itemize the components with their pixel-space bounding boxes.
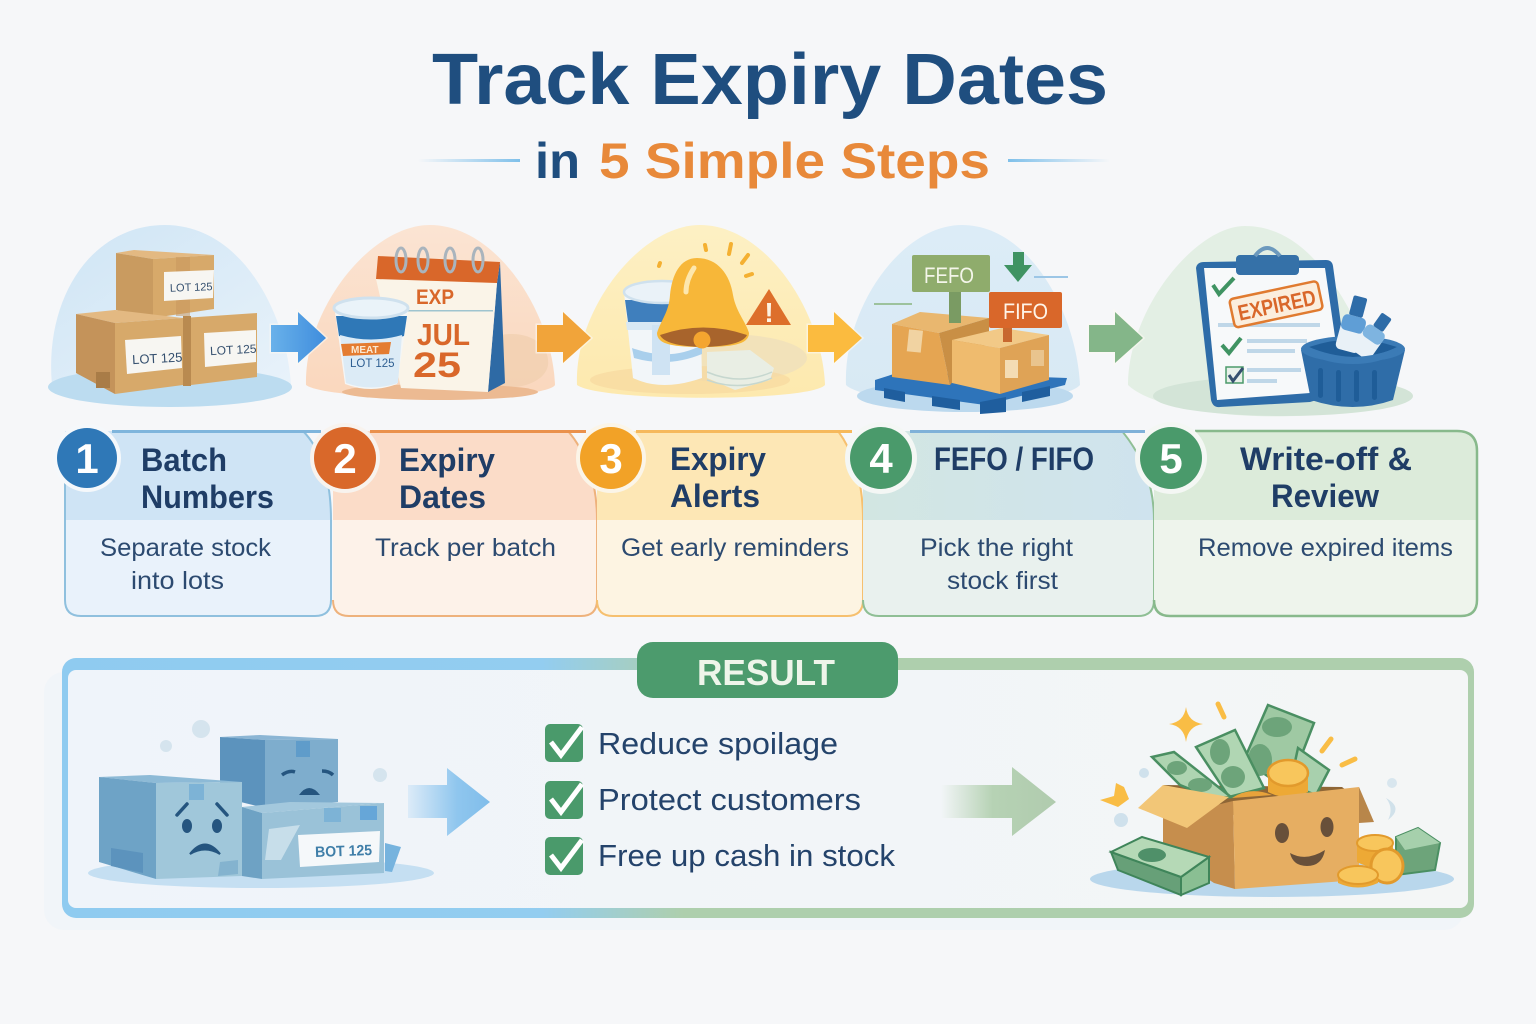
badge 1 bbox=[53, 424, 121, 492]
step card 4: FEFO / FIFO: stock first bbox=[947, 567, 1058, 595]
step card 5: write-off and review: Write-off & bbox=[1240, 441, 1412, 477]
step card 5: write-off and review: Review bbox=[1271, 478, 1379, 514]
icon: clipboard and bin bbox=[1128, 226, 1413, 416]
icon: sad blue boxes: BOT 125 bbox=[315, 842, 372, 861]
step card 5: write-off and review bbox=[1154, 431, 1477, 616]
icon: stacked lot boxes bbox=[48, 225, 292, 407]
result heading pill bbox=[637, 642, 898, 698]
icon: stacked lot boxes: LOT 125 bbox=[132, 350, 183, 367]
step card 4: FEFO / FIFO bbox=[863, 430, 1154, 616]
icon: calendar and cup: LOT 125 bbox=[350, 358, 395, 370]
badge 5: 5 bbox=[1159, 435, 1183, 482]
icon: FEFO FIFO pallet: FEFO bbox=[924, 263, 974, 288]
result heading pill: RESULT bbox=[697, 652, 835, 693]
badge 4: 4 bbox=[869, 435, 893, 482]
step card 3: expiry alerts: Get early reminders bbox=[621, 534, 849, 562]
icon: calendar and cup: MEAT bbox=[351, 345, 379, 356]
step card 4: FEFO / FIFO: FEFO / FIFO bbox=[934, 441, 1094, 477]
subtitle: in bbox=[535, 133, 580, 189]
icon: calendar and cup: JUL bbox=[417, 317, 470, 352]
step card 2: expiry dates: Dates bbox=[399, 479, 486, 515]
step card 3: expiry alerts: Expiry bbox=[670, 441, 766, 477]
icon: calendar and cup bbox=[306, 225, 555, 400]
subtitle: 5 Simple Steps bbox=[599, 133, 990, 189]
benefits checklist bbox=[545, 724, 895, 875]
title: Track Expiry Dates bbox=[432, 40, 1108, 120]
step card 4: FEFO / FIFO: Pick the right bbox=[920, 534, 1073, 562]
check item 3: Free up cash in stock bbox=[598, 838, 895, 873]
icon: clipboard and bin: EXPIRED bbox=[1236, 285, 1318, 326]
step card 1: batch numbers: Batch bbox=[141, 442, 227, 478]
step card 1: batch numbers bbox=[65, 430, 331, 616]
icon: stacked lot boxes: LOT 125 bbox=[210, 342, 257, 358]
arrow 4 to 5 bbox=[1089, 312, 1143, 363]
icon: sad blue boxes bbox=[88, 720, 434, 888]
panel: result bbox=[44, 642, 1474, 930]
step card 1: batch numbers: Separate stock bbox=[100, 534, 272, 562]
badge 1: 1 bbox=[75, 435, 99, 482]
step card 2: expiry dates bbox=[333, 430, 597, 616]
step card 2: expiry dates: Track per batch bbox=[375, 534, 556, 562]
icon: alert bell bbox=[577, 225, 825, 398]
icon: stacked lot boxes: LOT 125 bbox=[170, 281, 213, 295]
arrow 3 to 4 bbox=[808, 312, 862, 363]
badge 3: 3 bbox=[599, 435, 623, 482]
arrow: benefits to happy box bbox=[941, 767, 1056, 836]
icon: FEFO FIFO pallet: FIFO bbox=[1003, 299, 1048, 324]
icon: calendar and cup: EXP bbox=[416, 286, 454, 309]
subtitle bbox=[418, 133, 1110, 189]
step card 2: expiry dates: Expiry bbox=[399, 442, 495, 478]
badge 5 bbox=[1135, 422, 1207, 494]
step card 3: expiry alerts: Alerts bbox=[670, 478, 760, 514]
step card 3: expiry alerts bbox=[597, 430, 863, 616]
check item 2: Protect customers bbox=[598, 782, 861, 817]
arrow 2 to 3 bbox=[537, 312, 591, 363]
icon: calendar and cup: 25 bbox=[413, 346, 461, 385]
check item 1: Reduce spoilage bbox=[598, 726, 838, 761]
icon: alert bell: ! bbox=[764, 297, 774, 328]
badge 2: 2 bbox=[333, 435, 357, 482]
step card 1: batch numbers: Numbers bbox=[141, 479, 274, 515]
arrow: problem to benefits bbox=[408, 768, 490, 836]
icon: happy box with cash bbox=[1090, 704, 1454, 897]
badge 2 bbox=[310, 423, 380, 493]
step card 5: write-off and review: Remove expired items bbox=[1198, 534, 1453, 562]
badge 4 bbox=[845, 422, 917, 494]
arrow 1 to 2 bbox=[271, 312, 326, 363]
badge 3 bbox=[576, 423, 646, 493]
icon: FEFO FIFO pallet bbox=[846, 225, 1080, 414]
step card 1: batch numbers: into lots bbox=[131, 567, 224, 595]
